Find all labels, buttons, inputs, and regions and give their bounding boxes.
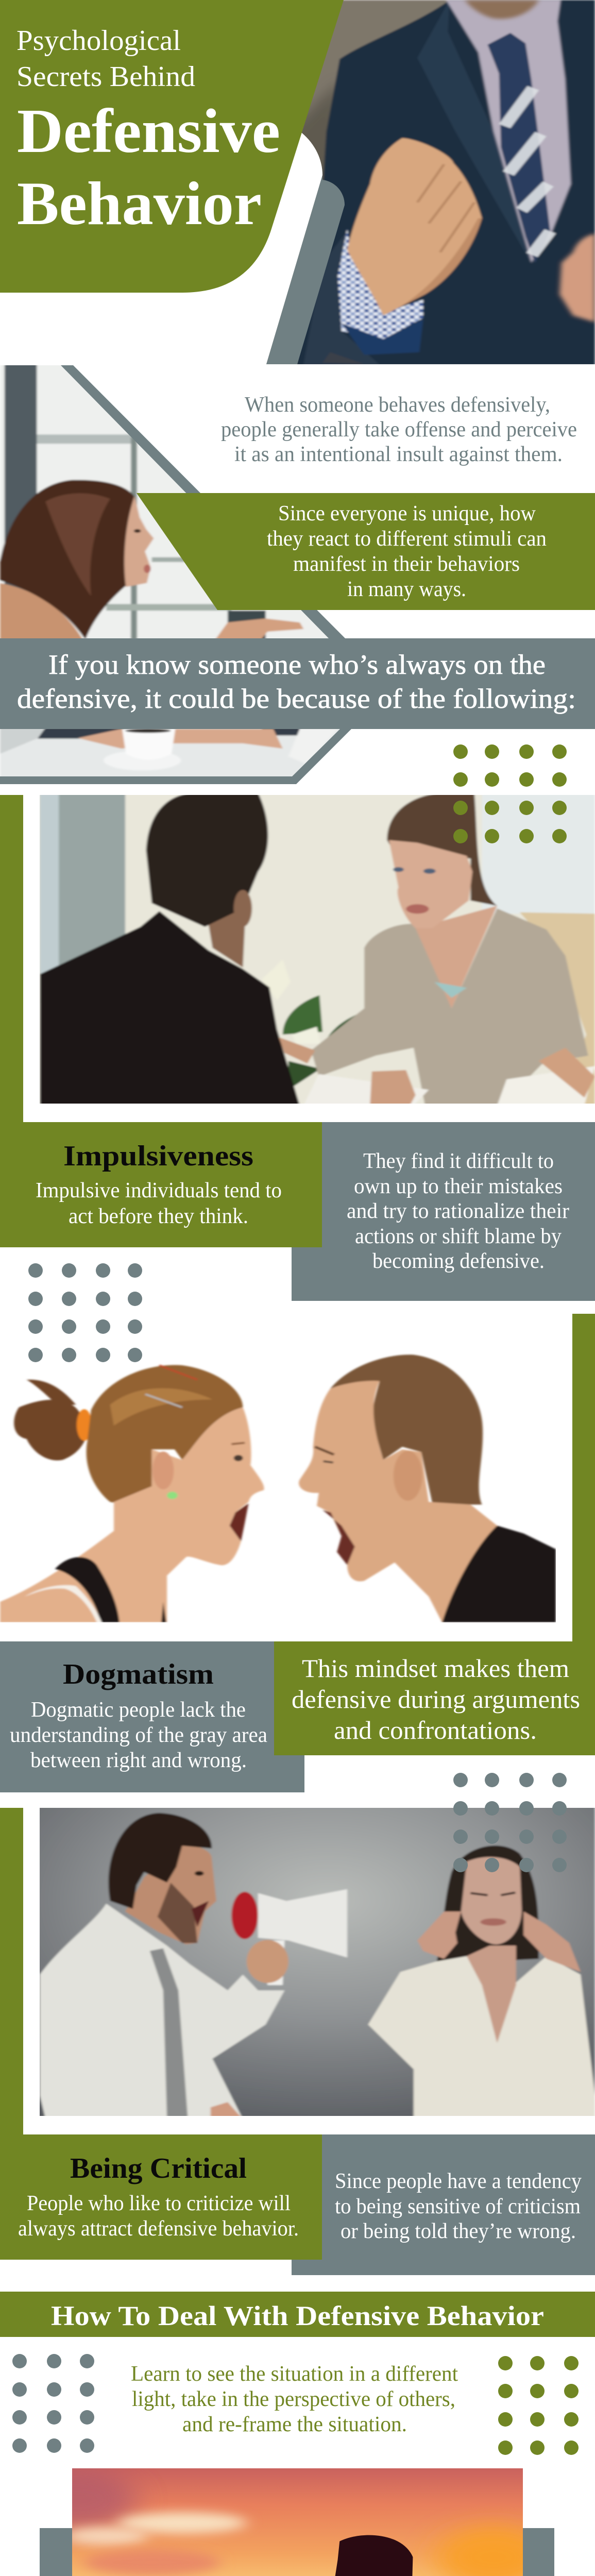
gray panel: dogmatism: understanding of the gray area — [10, 1723, 267, 1747]
photo: woman and man shouting face to face — [0, 1354, 556, 1622]
green panel: this mindset: defensive during arguments — [292, 1685, 580, 1714]
section heading: how to deal — [0, 2292, 595, 2337]
title text: Secrets Behind — [16, 61, 195, 93]
gray panel: dogmatism — [0, 1641, 304, 1792]
gray panel: since people have a tendency: Since people have a tendency — [335, 2170, 582, 2193]
dots: green grid right of advice — [498, 2356, 579, 2455]
gray panel: dogmatism: between right and wrong. — [30, 1749, 247, 1772]
green panel: impulsiveness: act before they think. — [69, 1205, 248, 1228]
green side bar: impulsiveness — [0, 795, 23, 1125]
green panel: impulsiveness: Impulsiveness — [63, 1140, 253, 1172]
advice text: light, take in the perspective of others, — [132, 2387, 455, 2411]
green side bar: dogmatism — [572, 1314, 595, 1643]
photo: man and woman arguing over papers — [38, 793, 595, 1106]
section heading: how to deal: How To Deal With Defensive Behavior — [51, 2300, 544, 2331]
advice text: Learn to see the situation in a different — [131, 2362, 458, 2386]
title text: Psychological — [16, 25, 181, 57]
intro text — [221, 393, 577, 466]
gray heading band: defensive, it could be because of the following: — [17, 683, 576, 714]
dots: gray grid left — [28, 1263, 142, 1362]
gray frame behind sunset photo — [40, 2528, 554, 2576]
green panel: being critical: People who like to criticize will — [27, 2192, 291, 2215]
photo: man in hoodie silhouetted at sunset — [72, 2468, 523, 2576]
green panel: impulsiveness — [0, 1122, 322, 1247]
green panel: being critical: always attract defensive behavior. — [18, 2217, 299, 2241]
gray panel: they find it difficult — [292, 1122, 595, 1301]
green panel: this mindset — [274, 1641, 595, 1755]
intro text: people generally take offense and perceive — [221, 418, 577, 442]
intro text: When someone behaves defensively, — [245, 393, 550, 417]
hexagon frame: upper diagonal — [61, 365, 346, 639]
gray heading band — [0, 638, 595, 729]
gray panel: they find it difficult: own up to their mistakes — [354, 1175, 563, 1198]
title panel — [0, 0, 344, 293]
green panel: being critical: Being Critical — [70, 2153, 247, 2184]
green panel: this mindset: and confrontations. — [334, 1716, 537, 1744]
green callout: everyone is unique: in many ways. — [347, 578, 466, 601]
advice text — [131, 2362, 458, 2436]
green callout: everyone is unique: Since everyone is unique, how — [278, 502, 536, 526]
green panel: being critical — [0, 2134, 322, 2260]
intro text: it as an intentional insult against them. — [234, 443, 563, 466]
gray panel: since people have a tendency — [292, 2134, 595, 2275]
photo: man shouting through a megaphone at woman covering ears — [38, 1806, 595, 2119]
advice text: and re-frame the situation. — [182, 2413, 407, 2436]
title text: Defensive — [17, 96, 280, 166]
title text — [16, 25, 280, 238]
gray panel: they find it difficult: They find it difficult to — [363, 1149, 554, 1173]
gray panel: dogmatism: Dogmatic people lack the — [31, 1698, 246, 1722]
gray heading band: If you know someone who’s always on the — [48, 649, 546, 680]
gray panel: they find it difficult: becoming defensive. — [372, 1249, 545, 1273]
gray panel: dogmatism: Dogmatism — [63, 1658, 214, 1690]
gray panel: since people have a tendency: to being sensitive of criticism — [335, 2195, 581, 2218]
green callout: everyone is unique: manifest in their behaviors — [293, 552, 520, 576]
gray panel: they find it difficult: actions or shift blame by — [355, 1225, 562, 1248]
hero photo: man in suit raising a fist — [258, 0, 595, 365]
hexagon frame: lower edge — [0, 729, 351, 784]
title text: Behavior — [17, 169, 262, 238]
gray curved band — [266, 175, 345, 364]
green callout: everyone is unique: they react to different stimuli can — [267, 527, 547, 551]
green panel: impulsiveness: Impulsive individuals tend to — [36, 1179, 282, 1202]
photo: woman at cafe table pointing — [0, 362, 361, 783]
gray panel: they find it difficult: and try to rationalize their — [347, 1199, 569, 1223]
gray panel: since people have a tendency: or being told they’re wrong. — [341, 2219, 576, 2243]
white curved shape — [0, 133, 322, 364]
green panel: this mindset: This mindset makes them — [302, 1654, 569, 1683]
dots: green grid top right — [453, 744, 567, 843]
dots: gray grid right — [453, 1773, 567, 1872]
green side bar: being critical — [0, 1808, 23, 2138]
dots: gray grid left of advice — [12, 2354, 94, 2453]
green callout: everyone is unique — [137, 493, 595, 610]
